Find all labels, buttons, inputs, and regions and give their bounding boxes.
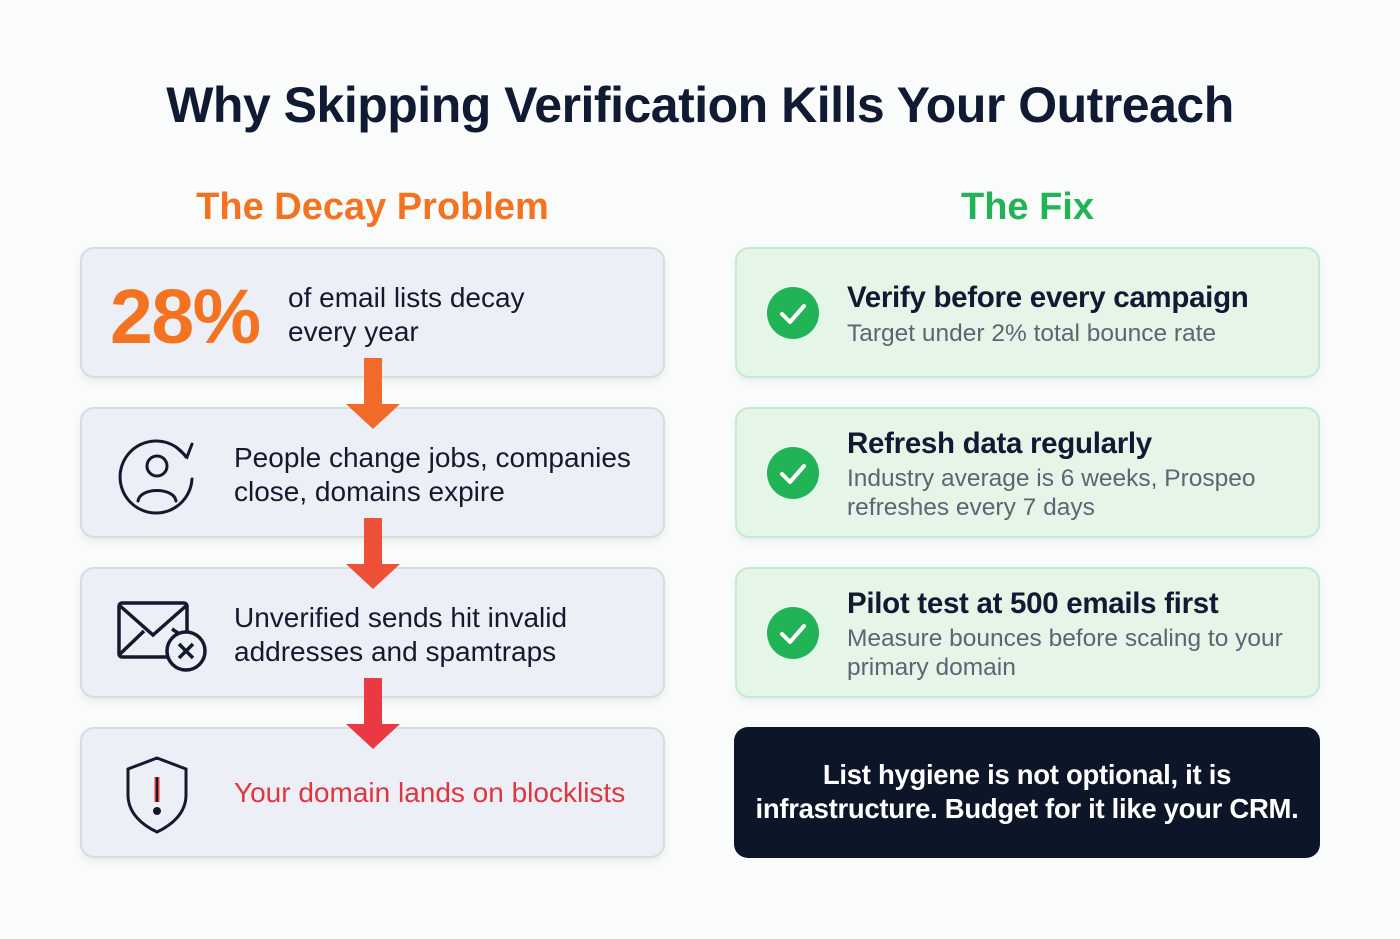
arrow 3 — [346, 678, 400, 749]
callout: hygiene: List hygiene is not optional, it is — [823, 759, 1231, 790]
card: 28% decay — [80, 247, 665, 378]
stat 28%: 28% — [110, 274, 260, 360]
callout: hygiene: infrastructure. Budget for it like your CRM. — [756, 793, 1298, 824]
sub: refresh: refreshes every 7 days — [847, 494, 1095, 521]
sub: refresh — [847, 465, 1256, 521]
text: people change — [234, 442, 631, 507]
card: pilot — [735, 567, 1320, 698]
title: pilot: Pilot test at 500 emails first — [847, 587, 1218, 620]
arrow 1 — [346, 358, 400, 429]
callout: hygiene — [734, 727, 1320, 858]
heading: the fix: The Fix — [961, 186, 1094, 228]
text: blocklists: Your domain lands on blocklists — [234, 777, 625, 808]
card: blocklists — [80, 727, 665, 858]
icon: check — [767, 287, 819, 339]
card: unverified sends — [80, 567, 665, 698]
sub: verify: Target under 2% total bounce rate — [847, 320, 1216, 347]
text: decay: every year — [288, 316, 419, 347]
card: verify — [735, 247, 1320, 378]
icon: envelope x — [117, 601, 207, 672]
icon: check — [767, 607, 819, 659]
arrow 2 — [346, 518, 400, 589]
text: decay — [288, 282, 525, 347]
icon: person refresh — [118, 440, 194, 514]
title: verify: Verify before every campaign — [847, 281, 1249, 314]
text: decay: of email lists decay — [288, 282, 525, 313]
text: people change: close, domains expire — [234, 476, 505, 507]
text: people change: People change jobs, companies — [234, 442, 631, 473]
text: unverified: addresses and spamtraps — [234, 636, 556, 667]
card: refresh — [735, 407, 1320, 538]
sub: pilot: primary domain — [847, 654, 1016, 681]
title: Why Skipping Verification Kills Your Outreach — [166, 77, 1234, 133]
text: unverified — [234, 602, 567, 667]
icon: shield warning — [126, 756, 188, 834]
sub: refresh: Industry average is 6 weeks, Prospeo — [847, 465, 1256, 492]
heading: decay problem: The Decay Problem — [196, 186, 549, 228]
title: refresh: Refresh data regularly — [847, 427, 1152, 460]
card: people change — [80, 407, 665, 538]
sub: pilot: Measure bounces before scaling to your — [847, 625, 1283, 652]
sub: pilot — [847, 625, 1283, 681]
text: unverified: Unverified sends hit invalid — [234, 602, 567, 633]
icon: check — [767, 447, 819, 499]
